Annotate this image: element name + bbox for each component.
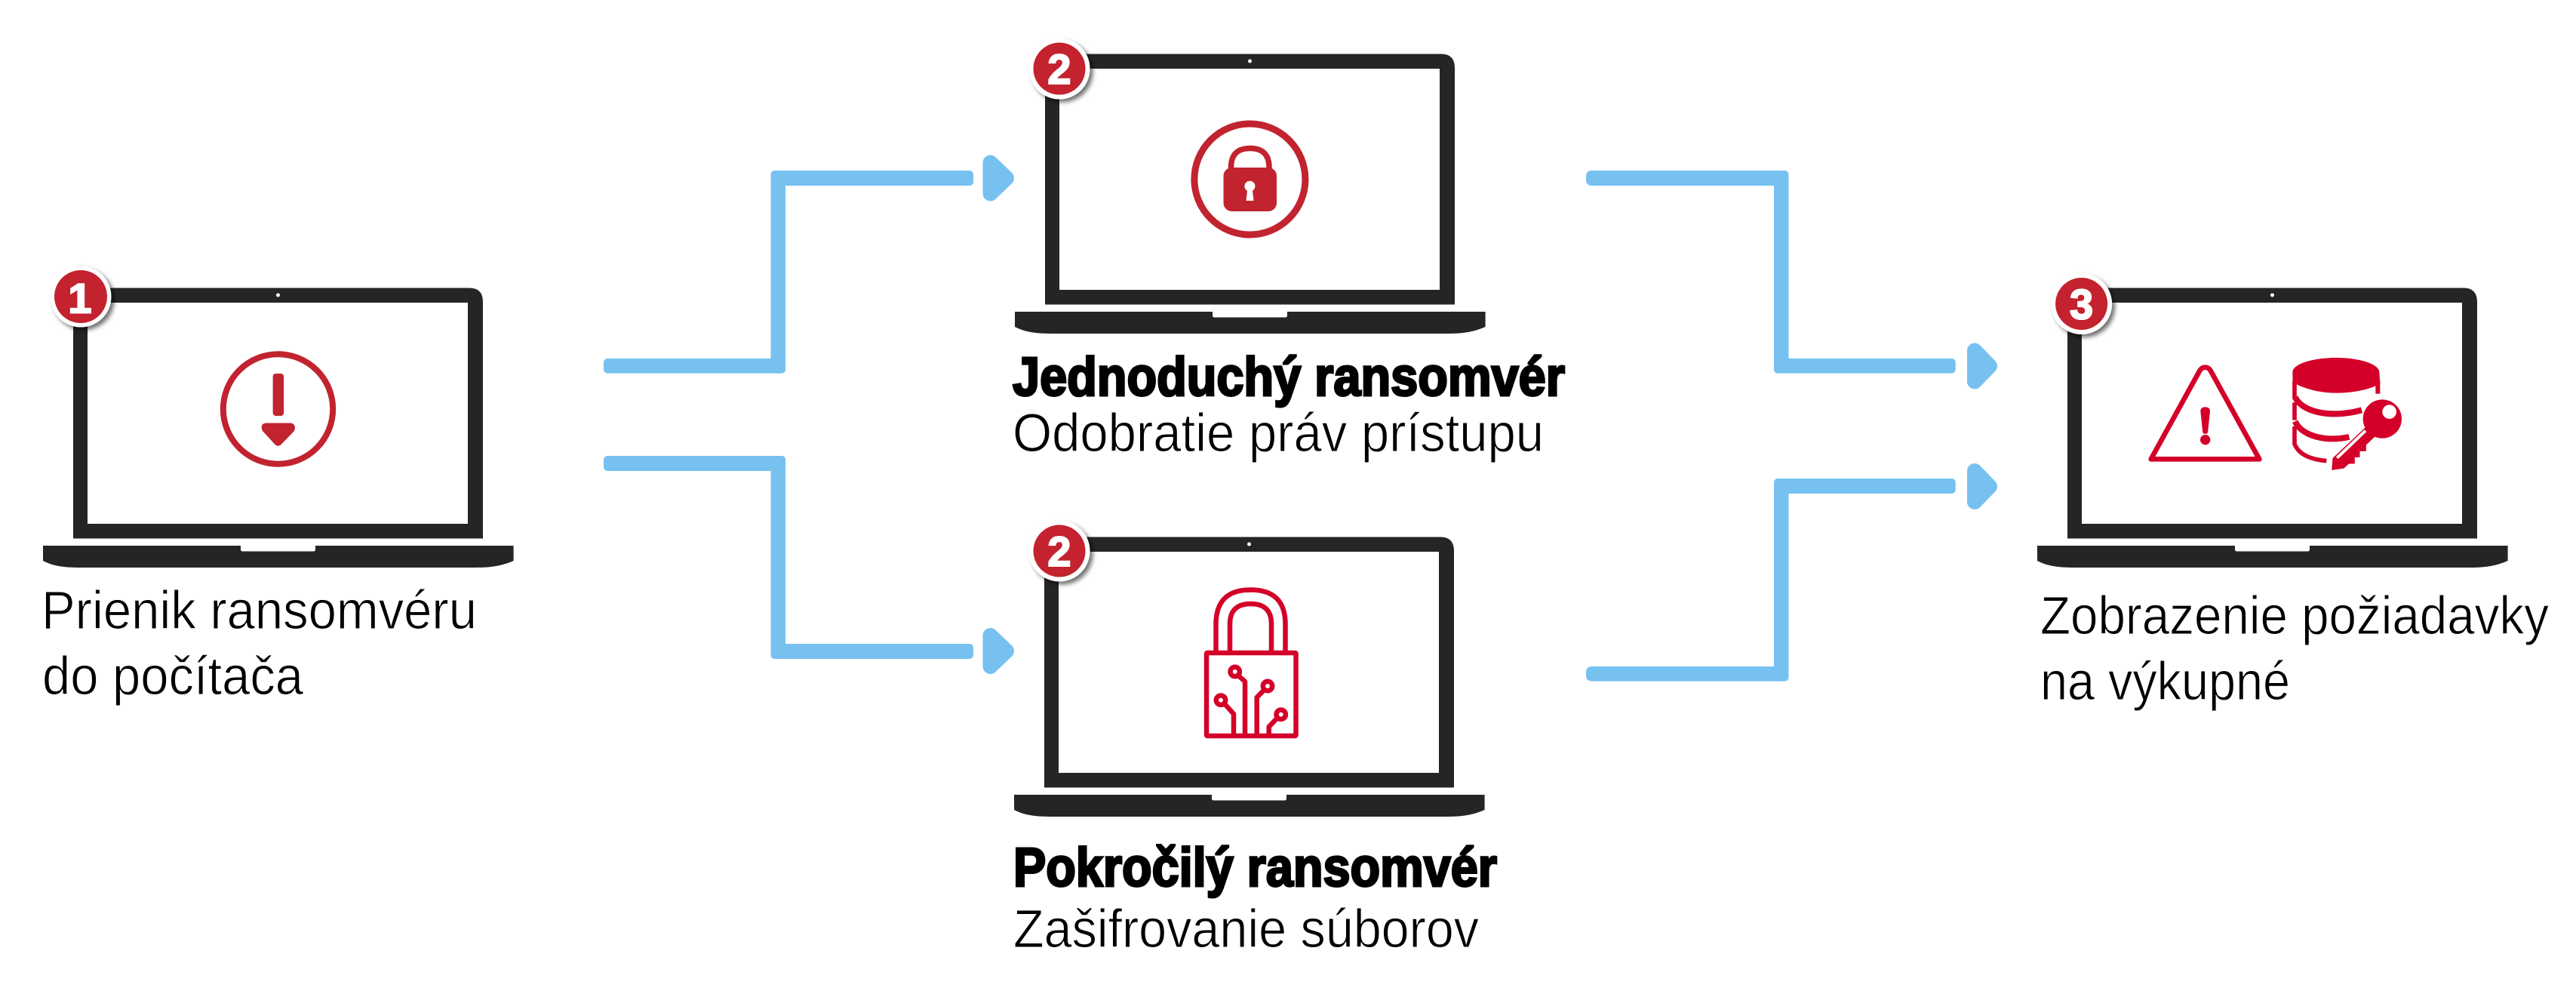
badge: number 1: 1 bbox=[68, 275, 92, 322]
panel: step 2 simple ransomware bbox=[1013, 38, 1565, 463]
text: simple ransomware caption bbox=[1013, 347, 1565, 463]
text: advanced ransomware caption bbox=[1013, 838, 1497, 959]
laptop bbox=[43, 288, 514, 568]
icon: database with key bbox=[2292, 358, 2402, 471]
icon: padlock bbox=[1194, 124, 1305, 235]
icon: download warning bbox=[223, 354, 333, 464]
text: simple ransomware caption: Jednoduchý ransomvér bbox=[1013, 347, 1565, 408]
text: advanced ransomware caption: Zašifrovanie súborov bbox=[1013, 900, 1479, 959]
text: step 3 caption bbox=[2040, 586, 2549, 712]
panel: step 1 ransomware intrusion bbox=[41, 266, 514, 706]
icon: warning triangle bbox=[2151, 368, 2259, 459]
text: step 1 caption: Prienik ransomvéru bbox=[41, 581, 477, 641]
panel: step 3 ransom demand bbox=[2037, 273, 2549, 712]
arrow: step 1 to simple ransomware bbox=[604, 163, 1007, 374]
text: simple ransomware caption: Odobratie práv prístupu bbox=[1013, 404, 1544, 463]
text: step 1 caption bbox=[41, 581, 477, 706]
laptop bbox=[1014, 537, 1485, 817]
badge: number 3 bbox=[2051, 273, 2112, 334]
text: step 1 caption: do počítača bbox=[42, 647, 303, 706]
laptop bbox=[1015, 54, 1486, 334]
badge: number 3: 3 bbox=[2070, 281, 2093, 328]
text: step 3 caption: Zobrazenie požiadavky bbox=[2040, 586, 2549, 646]
arrow: simple ransomware to step 3 bbox=[1586, 171, 1990, 382]
text: advanced ransomware caption: Pokročilý ransomvér bbox=[1013, 838, 1497, 898]
arrow: step 1 to advanced ransomware bbox=[604, 456, 1007, 666]
panel: step 2 advanced ransomware bbox=[1013, 521, 1497, 959]
icon: circuit padlock bbox=[1207, 590, 1296, 736]
badge: number 1 bbox=[50, 266, 112, 328]
badge: number 2: 2 bbox=[1047, 528, 1071, 575]
arrow: advanced ransomware to step 3 bbox=[1586, 471, 1990, 682]
badge: number 2: 2 bbox=[1047, 45, 1071, 93]
laptop bbox=[2037, 288, 2508, 568]
badge: number 2 bbox=[1029, 521, 1090, 581]
text: step 3 caption: na výkupné bbox=[2040, 652, 2290, 712]
badge: number 2 bbox=[1029, 38, 1090, 100]
